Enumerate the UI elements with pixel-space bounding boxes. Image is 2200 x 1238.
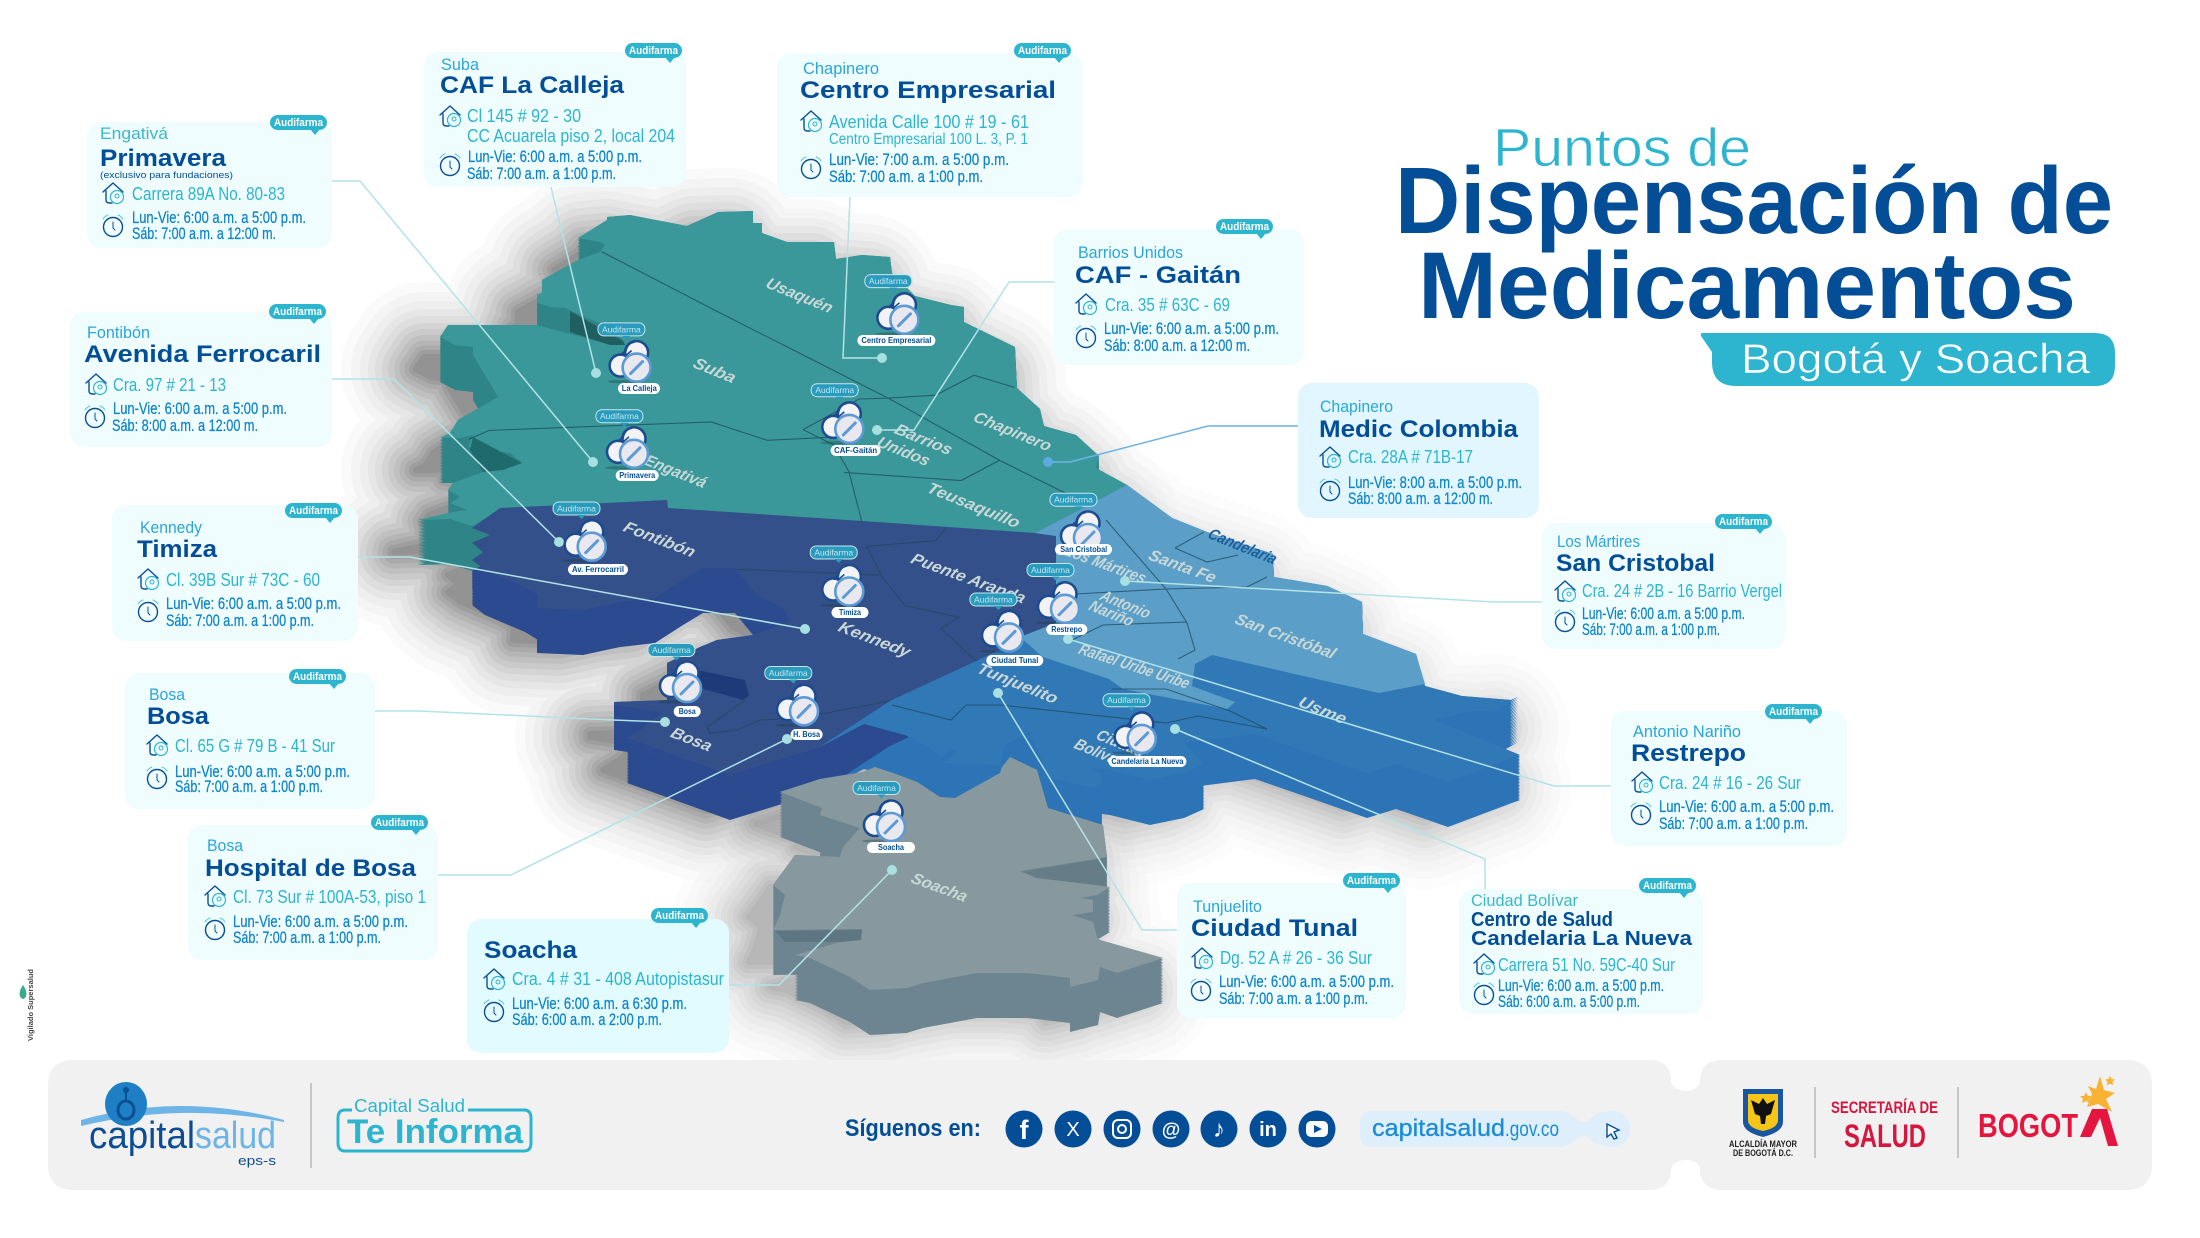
logo: Alcaldía Mayor de Bogotá: ALCALDÍA MAYOR (1729, 1139, 1797, 1149)
panel: CAF La Calleja: CC Acuarela piso 2, local 204 (467, 125, 675, 146)
district names: Chapinero (970, 408, 1055, 455)
map shadow (394, 243, 1496, 1022)
panel: Restrepo: Lun-Vie: 6:00 a.m. a 5:00 p.m. (1659, 798, 1834, 816)
map pin: Restrepo: Audifarma (1031, 565, 1070, 575)
label: Síguenos en: Síguenos en: (845, 1115, 981, 1142)
district names: Puente Aranda (908, 550, 1029, 607)
map pin: Bosa: Audifarma (652, 645, 691, 655)
map pin: Soacha: Soacha (878, 843, 904, 852)
panel: Bosa: Sáb: 7:00 a.m. a 1:00 p.m. (175, 778, 323, 796)
map pin: Soacha: Audifarma (857, 783, 896, 793)
map pin: Soacha (853, 782, 915, 853)
region: Soacha (773, 757, 1163, 1035)
map pin: Centro Empresarial: Centro Empresarial (861, 336, 931, 345)
panel: Hospital de Bosa: Cl. 73 Sur # 100A-53, piso 1 (233, 886, 426, 907)
panel: Primavera: Carrera 89A No. 80-83 (132, 183, 285, 204)
map pin: Timiza: Timiza (839, 608, 861, 617)
map pin: San Cristobal: Audifarma (1054, 495, 1093, 505)
district names: Kennedy (835, 618, 915, 661)
website link: .gov.co (1505, 1118, 1559, 1141)
panel: CAF La Calleja: Suba (441, 55, 480, 74)
map pin: La Calleja: Audifarma (602, 324, 641, 334)
district names: Bosa (667, 724, 715, 755)
panel: Restrepo: Cra. 24 # 16 - 26 Sur (1659, 772, 1801, 793)
panel: Centro de Salud Candelaria La Nueva: Audifarma (1643, 880, 1693, 892)
district names: Barrios (891, 421, 956, 459)
panel: CAF - Gaitán: Sáb: 8:00 a.m. a 12:00 m. (1104, 337, 1250, 355)
district names: Suba (690, 355, 739, 387)
social icons (1006, 1110, 1336, 1148)
map pin: Primavera (596, 410, 659, 481)
divider (310, 1083, 312, 1168)
panel: Timiza: Audifarma (289, 505, 339, 517)
map pin: Centro Empresarial (857, 275, 935, 346)
map pin: Centro Empresarial: Audifarma (869, 276, 908, 286)
subtitle pill: Bogotá y Soacha (1701, 333, 2115, 386)
panel: CAF - Gaitán (1054, 219, 1304, 365)
panel: Centro Empresarial: Sáb: 7:00 a.m. a 1:00 p.m. (829, 168, 983, 186)
panel: Ciudad Tunal: Audifarma (1347, 875, 1397, 887)
map pin: Bosa (648, 644, 701, 717)
panel: Avenida Ferrocaril: Avenida Ferrocaril (84, 341, 321, 368)
panel: San Cristobal: Sáb: 7:00 a.m. a 1:00 p.m. (1582, 621, 1720, 639)
district names: Rafael Uribe Uribe (1076, 641, 1193, 692)
map pin: H. Bosa: Audifarma (769, 668, 808, 678)
map pin: Ciudad Tunal: Ciudad Tunal (991, 656, 1038, 665)
panel: Soacha: Audifarma (655, 910, 705, 922)
panel: Avenida Ferrocaril: Lun-Vie: 6:00 a.m. a 5:00 p.m. (113, 400, 287, 418)
logo: Capital Salud: eps-s (238, 1153, 277, 1168)
social icons: in (1259, 1119, 1277, 1141)
panel: Restrepo (1611, 704, 1847, 846)
map pin: Av. Ferrocarril: Av. Ferrocarril (572, 565, 624, 574)
3D map of Bogotá and Soacha (418, 211, 1520, 1035)
panel: CAF La Calleja: Lun-Vie: 6:00 a.m. a 5:00 p.m. (468, 148, 642, 166)
map pin: La Calleja: La Calleja (622, 384, 657, 393)
district names: Santa Fe (1145, 547, 1220, 587)
panel: Soacha (467, 908, 729, 1053)
panel: CAF - Gaitán: Audifarma (1220, 221, 1270, 233)
logo: Capital Salud: capital (89, 1115, 195, 1157)
panel: Timiza: Lun-Vie: 6:00 a.m. a 5:00 p.m. (166, 595, 341, 613)
district names: Nariño (1086, 597, 1138, 630)
district names: Fontibón (620, 518, 699, 561)
title line: Dispensación de: Dispensación de (1395, 148, 2113, 254)
district names: Engativá (641, 452, 710, 492)
panel: Hospital de Bosa: Sáb: 7:00 a.m. a 1:00 p.m. (233, 929, 381, 947)
district names: Teusaquillo (924, 479, 1024, 532)
panel: Primavera: Lun-Vie: 6:00 a.m. a 5:00 p.m. (132, 209, 306, 227)
region: north districts (teal) (418, 211, 1127, 533)
district names: Usme (1295, 693, 1350, 728)
panel: Ciudad Tunal: Dg. 52 A # 26 - 36 Sur (1220, 947, 1372, 968)
panel: Centro Empresarial: Centro Empresarial (800, 77, 1056, 104)
panel: Ciudad Tunal: Sáb: 7:00 a.m. a 1:00 p.m. (1219, 990, 1368, 1008)
logo: Alcaldía Mayor de Bogotá: DE BOGOTÁ D.C. (1733, 1148, 1793, 1158)
logo: Secretaría de Salud: SECRETARÍA DE (1831, 1098, 1938, 1117)
map pin: Ciudad Tunal (970, 593, 1043, 666)
panel: Centro de Salud Candelaria La Nueva: Lun-Vie: 6:00 a.m. a 5:00 p.m. (1498, 977, 1664, 995)
district names: Soacha (908, 870, 971, 905)
map pin: Timiza: Audifarma (814, 548, 853, 558)
panel: Primavera: Primavera (100, 145, 227, 172)
logo: Te Informa: Te Informa (347, 1113, 524, 1151)
panel: Medic Colombia: Chapinero (1320, 397, 1393, 416)
panel: Ciudad Tunal: Tunjuelito (1193, 897, 1262, 916)
panel: Bosa: Lun-Vie: 6:00 a.m. a 5:00 p.m. (175, 763, 350, 781)
map pin: Candelaria La Nueva: Audifarma (1107, 695, 1146, 705)
map pin: CAF-Gaitán: Audifarma (815, 385, 854, 395)
panel: Restrepo: Antonio Nariño (1633, 722, 1741, 741)
map pin: San Cristobal: San Cristobal (1060, 545, 1107, 554)
logo: Capital Salud: salud (195, 1115, 276, 1157)
bay shading (470, 311, 749, 700)
panel: San Cristobal (1542, 514, 1785, 649)
panel: Centro de Salud Candelaria La Nueva: Candelaria La Nueva (1471, 928, 1693, 950)
district names: Bolívar (1071, 735, 1127, 770)
region walls (418, 211, 1520, 833)
title line: Puntos de: Puntos de (1493, 118, 1751, 178)
panel: Avenida Ferrocaril (70, 304, 332, 447)
map pin: Bosa: Bosa (679, 707, 696, 716)
region: west districts (navy) (472, 500, 1056, 775)
district names: Antonio (1096, 587, 1154, 622)
website link (1360, 1111, 1630, 1147)
panel: Timiza: Kennedy (140, 518, 202, 537)
website link: capitalsalud (1372, 1115, 1505, 1142)
panel: Primavera: (exclusivo para fundaciones) (100, 170, 233, 181)
panel: CAF La Calleja: Sáb: 7:00 a.m. a 1:00 p.m. (467, 165, 616, 183)
panel: CAF - Gaitán: CAF - Gaitán (1075, 262, 1241, 289)
map pin: Candelaria La Nueva (1103, 694, 1186, 767)
map pin: Av. Ferrocarril (553, 502, 628, 575)
panel: Timiza: Timiza (137, 536, 218, 563)
panel: Avenida Ferrocaril: Fontibón (87, 323, 150, 342)
map pin: Restrepo: Restrepo (1051, 625, 1082, 634)
panel: CAF - Gaitán: Lun-Vie: 6:00 a.m. a 5:00 p.m. (1104, 320, 1279, 338)
panel: Hospital de Bosa: Lun-Vie: 6:00 a.m. a 5:00 p.m. (233, 913, 408, 931)
panel: San Cristobal: San Cristobal (1556, 550, 1715, 577)
logo: Te Informa: Capital Salud (354, 1096, 465, 1116)
panel: Medic Colombia: Cra. 28A # 71B-17 (1348, 446, 1473, 467)
map pin: H. Bosa (765, 666, 823, 740)
panel: Centro de Salud Candelaria La Nueva: Sáb: 6:00 a.m. a 5:00 p.m. (1498, 993, 1640, 1011)
district names: Usaquén (763, 275, 837, 317)
logo: Bogotá (1978, 1076, 2118, 1146)
district names: Unidos (873, 434, 934, 470)
panel: Centro Empresarial: Chapinero (803, 59, 879, 78)
panel: CAF La Calleja: Audifarma (629, 45, 679, 57)
map pin: La Calleja (598, 323, 660, 394)
panel: Avenida Ferrocaril: Sáb: 8:00 a.m. a 12:00 m. (112, 417, 258, 435)
map pin: CAF-Gaitán (811, 384, 881, 456)
panel: CAF - Gaitán: Cra. 35 # 63C - 69 (1105, 294, 1230, 315)
panel: Centro de Salud Candelaria La Nueva (1459, 878, 1703, 1014)
panel: San Cristobal: Los Mártires (1557, 532, 1640, 551)
panel: Restrepo: Audifarma (1769, 706, 1819, 718)
map pin: Timiza (810, 546, 868, 618)
panel: Hospital de Bosa: Hospital de Bosa (205, 855, 417, 882)
panel: Timiza (112, 503, 358, 641)
district boundaries (469, 252, 1267, 733)
location dots (554, 353, 1180, 875)
vigilado label (20, 969, 35, 1041)
panel: Bosa: Cl. 65 G # 79 B - 41 Sur (175, 735, 335, 756)
panel: Ciudad Tunal: Ciudad Tunal (1191, 915, 1358, 942)
social icons: X (1066, 1119, 1080, 1141)
panel: CAF La Calleja: CAF La Calleja (440, 72, 625, 99)
map pin: Restrepo (1027, 564, 1087, 635)
panel: CAF La Calleja (424, 43, 686, 187)
panel: Centro Empresarial: Avenida Calle 100 # 19 - 61 (829, 111, 1029, 132)
logo: Capital Salud (81, 1082, 284, 1168)
panel: Medic Colombia: Lun-Vie: 8:00 a.m. a 5:00 p.m. (1348, 474, 1522, 492)
panel: Bosa (125, 669, 375, 809)
region: south districts (mid blue) (818, 485, 1520, 788)
district names: Tunjuelito (974, 660, 1062, 707)
social icons: @ (1162, 1120, 1180, 1141)
vigilado label: Vigilado Supersalud (26, 969, 35, 1041)
map pin: CAF-Gaitán: CAF-Gaitán (834, 446, 877, 455)
panel: Hospital de Bosa (188, 815, 438, 960)
district names (620, 275, 1350, 905)
panel: Centro Empresarial: Lun-Vie: 7:00 a.m. a 5:00 p.m. (829, 151, 1009, 169)
social icons: f (1020, 1115, 1030, 1145)
panel: Restrepo: Sáb: 7:00 a.m. a 1:00 p.m. (1659, 815, 1808, 833)
logo: Bogotá: BOGOT (1978, 1107, 2078, 1144)
panel: Timiza: Cl. 39B Sur # 73C - 60 (166, 569, 320, 590)
panel: Centro de Salud Candelaria La Nueva: Carrera 51 No. 59C-40 Sur (1498, 954, 1675, 975)
panel: Centro de Salud Candelaria La Nueva: Centro de Salud (1471, 909, 1613, 931)
panel: Timiza: Sáb: 7:00 a.m. a 1:00 p.m. (166, 612, 314, 630)
panel: Bosa: Bosa (147, 703, 210, 730)
panel: Medic Colombia (1298, 383, 1539, 518)
panel: Ciudad Tunal (1177, 873, 1406, 1018)
panel: Bosa: Audifarma (293, 671, 343, 683)
panel: San Cristobal: Audifarma (1719, 516, 1769, 528)
map pin: Av. Ferrocarril: Audifarma (557, 504, 596, 514)
map pin: San Cristobal (1050, 493, 1112, 555)
panel: Soacha: Lun-Vie: 6:00 a.m. a 6:30 p.m. (512, 995, 687, 1013)
panel: Hospital de Bosa: Audifarma (375, 817, 425, 829)
logo: Secretaría de Salud (1815, 1087, 1958, 1158)
footer bar (48, 1060, 2152, 1190)
district names: Candelaria (1205, 525, 1280, 568)
panel: CAF - Gaitán: Barrios Unidos (1078, 243, 1183, 262)
panel: Medic Colombia: Medic Colombia (1319, 416, 1519, 443)
panel: Centro Empresarial: Audifarma (1018, 45, 1068, 57)
panel: Hospital de Bosa: Bosa (207, 836, 244, 855)
logo: Alcaldía Mayor de Bogotá (1729, 1089, 1797, 1158)
district names: Ciudad (1093, 726, 1149, 761)
title (1395, 118, 2115, 386)
panel: Restrepo: Restrepo (1631, 740, 1746, 767)
map pin: Ciudad Tunal: Audifarma (974, 594, 1013, 604)
panel: Centro Empresarial (777, 43, 1083, 197)
panel: Primavera: Audifarma (274, 117, 324, 129)
panel: Primavera (87, 115, 332, 248)
panel: Centro de Salud Candelaria La Nueva: Ciudad Bolívar (1471, 891, 1578, 910)
map pin: H. Bosa: H. Bosa (793, 730, 821, 739)
map pin: Primavera: Audifarma (600, 411, 639, 421)
district names: San Cristóbal (1232, 611, 1339, 663)
panel: Bosa: Bosa (149, 685, 186, 704)
panel: Centro Empresarial: Centro Empresarial 100 L. 3, P. 1 (829, 131, 1028, 148)
region: centre-east districts (light blue) (1020, 485, 1425, 709)
social icons: ♪ (1213, 1116, 1225, 1143)
leader lines (332, 181, 1611, 985)
logo: Secretaría de Salud: SALUD (1844, 1118, 1926, 1154)
panel: Ciudad Tunal: Lun-Vie: 6:00 a.m. a 5:00 p.m. (1219, 973, 1394, 991)
panel: Soacha: Sáb: 6:00 a.m. a 2:00 p.m. (512, 1011, 662, 1029)
panel: San Cristobal: Cra. 24 # 2B - 16 Barrio Vergel (1582, 580, 1782, 601)
panel: Primavera: Engativá (100, 124, 169, 143)
district names: Los Mártires (1061, 542, 1150, 587)
map pin: Candelaria La Nueva: Candelaria La Nueva (1111, 757, 1184, 766)
subtitle pill: Bogotá y Soacha: Bogotá y Soacha (1741, 335, 2091, 382)
panel: Avenida Ferrocaril: Cra. 97 # 21 - 13 (113, 374, 226, 395)
panel: Avenida Ferrocaril: Audifarma (273, 306, 323, 318)
logo: Te Informa (338, 1096, 531, 1151)
panel: CAF La Calleja: Cl 145 # 92 - 30 (467, 105, 581, 126)
title line: Medicamentos: Medicamentos (1418, 233, 2076, 339)
panel: Soacha: Cra. 4 # 31 - 408 Autopistasur (512, 968, 724, 989)
panel: Soacha: Soacha (484, 937, 578, 964)
panel: Primavera: Sáb: 7:00 a.m. a 12:00 m. (132, 225, 276, 243)
map pin: Primavera: Primavera (619, 471, 656, 480)
panel: San Cristobal: Lun-Vie: 6:00 a.m. a 5:00 p.m. (1582, 605, 1745, 623)
panel: Medic Colombia: Sáb: 8:00 a.m. a 12:00 m. (1348, 490, 1493, 508)
